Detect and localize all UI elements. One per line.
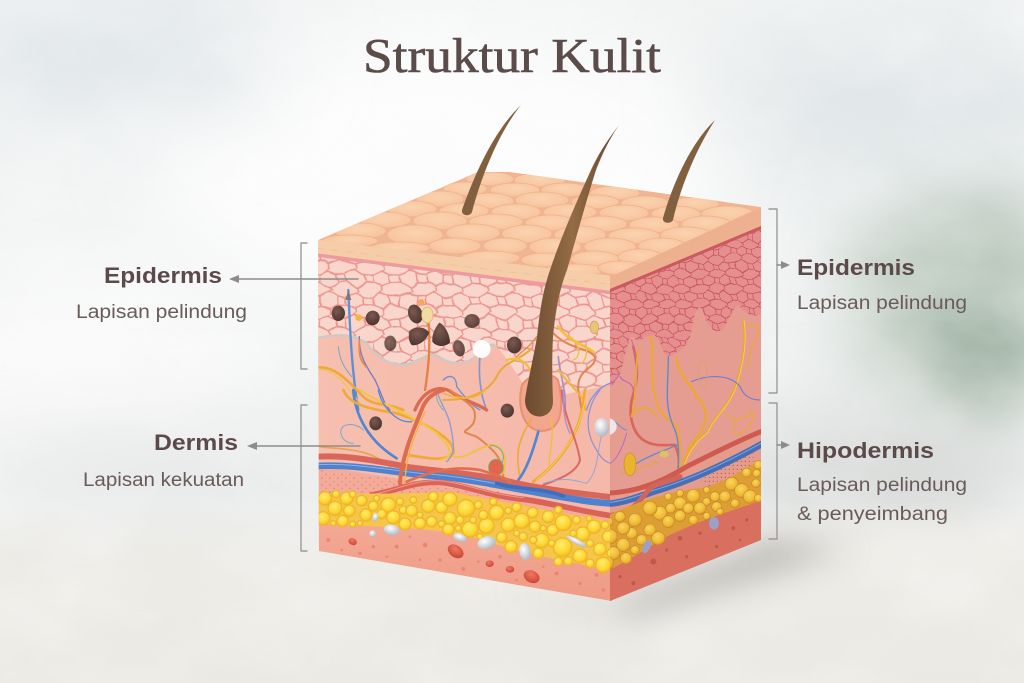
blue vein — [317, 466, 613, 503]
skin cross-section block — [300, 172, 773, 605]
melanocytes and glands — [332, 299, 599, 358]
fat layer — [317, 490, 616, 573]
label: hipodermis right: & penyeimbang — [797, 504, 948, 525]
right fat lobules — [610, 460, 761, 570]
label: dermis left: Lapisan kekuatan — [83, 470, 244, 491]
label: hipodermis right: Lapisan pelindung — [797, 475, 967, 496]
label: epidermis left: Lapisan pelindung — [76, 302, 247, 323]
bracket: left epidermis — [301, 243, 307, 369]
hair follicle sheath — [520, 375, 561, 431]
right vessels — [600, 431, 763, 516]
arrow: epidermis left — [229, 275, 358, 283]
label: hipodermis right — [797, 438, 967, 525]
surface cells — [322, 172, 755, 276]
pink basal line — [316, 255, 614, 293]
right epidermis cells — [610, 230, 761, 387]
right tissue dots — [618, 518, 748, 585]
arrow: dermis left — [247, 442, 360, 450]
label: dermis left: Dermis — [154, 430, 238, 455]
hair: right — [663, 120, 715, 223]
arrow: epidermis right — [777, 261, 790, 269]
right surface band — [610, 205, 763, 293]
lower tissue — [316, 505, 612, 605]
dotted subdermis — [318, 466, 610, 525]
label: dermis left — [83, 430, 244, 491]
red upper vessel — [317, 456, 613, 497]
label: epidermis right — [797, 255, 967, 314]
title: Struktur Kulit — [363, 28, 661, 83]
right face — [610, 207, 761, 601]
label: epidermis right: Epidermis — [797, 255, 915, 280]
bracket: left dermis — [301, 405, 307, 551]
label: hipodermis right: Hipodermis — [797, 438, 934, 463]
red lower artery — [372, 482, 613, 516]
epidermis cell layer — [318, 257, 610, 425]
bracket: right hipodermis — [769, 403, 777, 539]
tissue dots and blood cells — [326, 535, 605, 592]
vessels and layers, lower dermis — [317, 390, 620, 516]
top surface band — [316, 238, 614, 292]
vessels and nerves, upper dermis — [319, 290, 610, 410]
cube shadow — [500, 538, 850, 618]
label: epidermis left: Epidermis — [104, 263, 222, 288]
hair: main with bulb — [525, 125, 619, 416]
hair: left — [462, 105, 521, 215]
right subdermis dots — [677, 468, 680, 470]
top face of skin — [318, 172, 761, 276]
label: epidermis right: Lapisan pelindung — [797, 293, 967, 314]
label: epidermis left — [76, 263, 247, 323]
bracket: right epidermis — [769, 209, 777, 393]
right lower tissue — [610, 502, 761, 601]
left face — [318, 240, 612, 601]
arrow: hipodermis right — [777, 441, 790, 449]
